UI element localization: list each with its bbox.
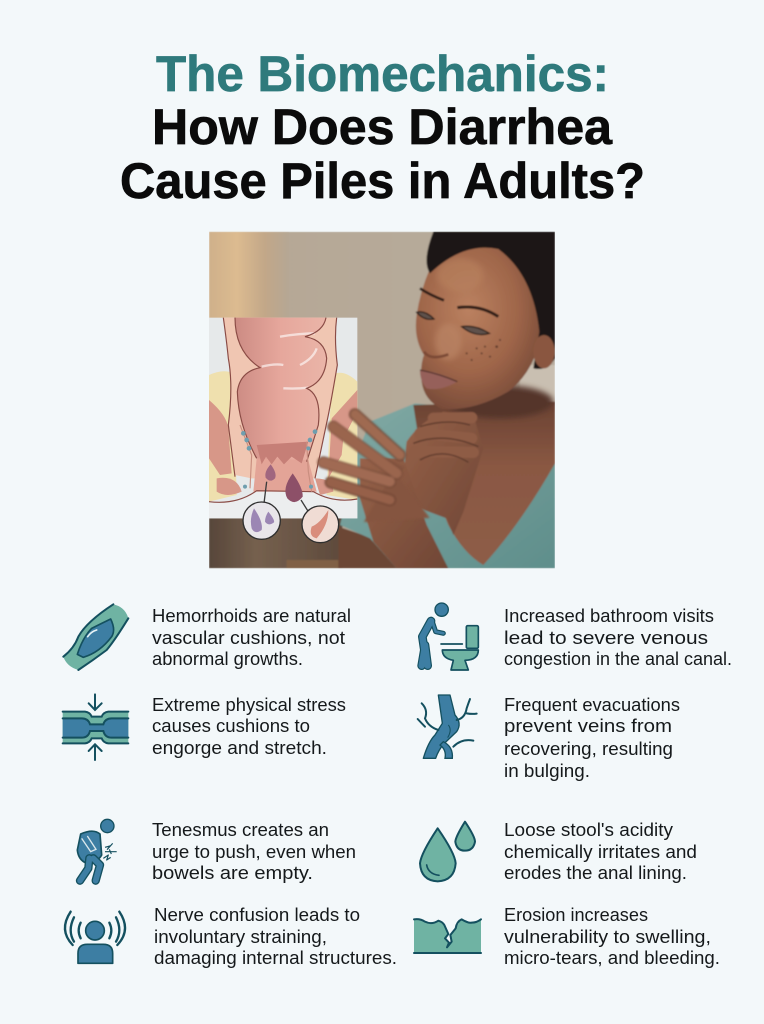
illustration: anal canal cross-section: [209, 318, 357, 543]
text: tenesmus: bowels are empty.: [152, 863, 313, 883]
text: hemorrhoids: abnormal growths.: [152, 649, 303, 669]
text: frequent evacuations: prevent veins from: [504, 716, 672, 736]
text: nerve confusion: involuntary straining,: [154, 927, 327, 947]
text: bathroom visits: lead to severe venous: [504, 628, 708, 648]
item: frequent evacuations: [418, 695, 680, 781]
item: physical stress: [63, 694, 346, 760]
text: frequent evacuations: recovering, resulting: [504, 739, 673, 759]
item: hemorrhoids cushions: [63, 604, 351, 670]
item: tenesmus: [77, 819, 356, 883]
icon: water drops: [420, 822, 475, 881]
text: physical stress: Extreme physical stress: [152, 695, 346, 715]
item: bathroom visits: [422, 603, 732, 670]
title: [120, 46, 645, 209]
text: loose stool: chemically irritates and: [504, 842, 697, 862]
text: erosion: vulnerability to swelling,: [504, 927, 711, 947]
icon: eroded lining with cracks: [414, 919, 481, 953]
title: Cause Piles in Adults?: [120, 153, 645, 209]
text: erosion: micro-tears, and bleeding.: [504, 948, 720, 968]
text: tenesmus: Tenesmus creates an: [152, 820, 329, 840]
text: erosion: Erosion increases: [504, 905, 648, 925]
text: nerve confusion: damaging internal structures.: [154, 948, 397, 968]
text: bathroom visits: congestion in the anal canal.: [504, 649, 732, 669]
icon: person at toilet: [422, 603, 478, 670]
text: tenesmus: urge to push, even when: [152, 842, 356, 862]
icon: person with signal waves: [65, 912, 125, 963]
text: physical stress: engorge and stretch.: [152, 738, 327, 758]
item: loose stool acidity: [420, 820, 697, 883]
text: loose stool: Loose stool's acidity: [504, 820, 674, 840]
icon: vascular cushion: [63, 604, 128, 670]
item: nerve confusion: [65, 905, 397, 968]
title: The Biomechanics:: [156, 46, 609, 102]
icon: bulging veins: [418, 695, 477, 758]
text: loose stool: erodes the anal lining.: [504, 863, 687, 883]
text: bathroom visits: Increased bathroom visits: [504, 606, 714, 626]
text: physical stress: causes cushions to: [152, 716, 310, 736]
photo: woman holding anatomical illustration: [209, 232, 555, 568]
item: erosion: [414, 905, 720, 968]
hand fingers over illustration: [323, 414, 423, 518]
text: hemorrhoids: vascular cushions, not: [152, 628, 345, 648]
title: How Does Diarrhea: [152, 99, 613, 155]
text: hemorrhoids: Hemorrhoids are natural: [152, 606, 351, 626]
text: frequent evacuations: in bulging.: [504, 761, 590, 781]
icon: person bending in pain: [77, 819, 117, 881]
text: frequent evacuations: Frequent evacuations: [504, 695, 680, 715]
icon: compressed vessel with arrows: [63, 694, 128, 760]
text: nerve confusion: Nerve confusion leads to: [154, 905, 360, 925]
